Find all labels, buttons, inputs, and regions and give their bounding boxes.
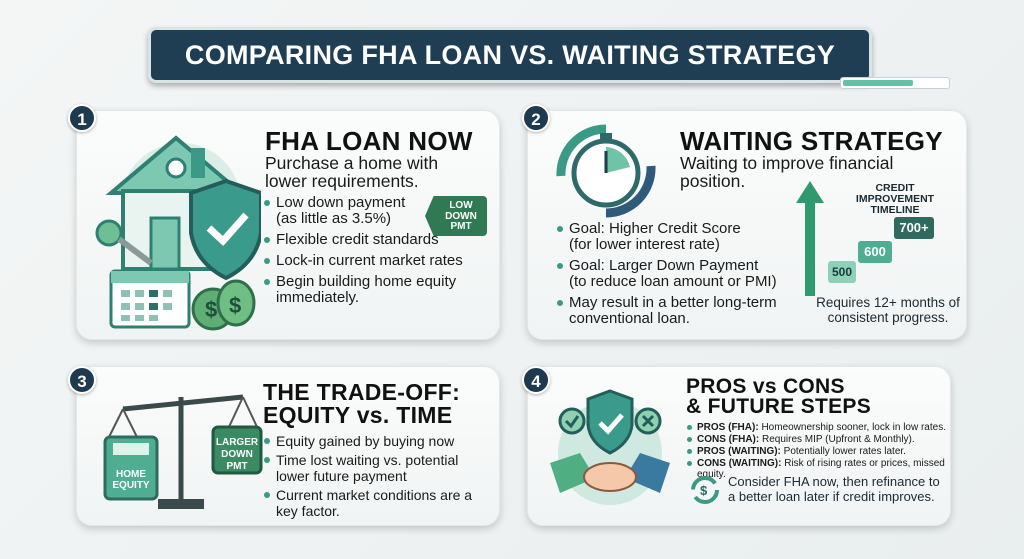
bullet list: Begin building home equity immediately. [276, 273, 456, 306]
tag: low down pmt [425, 196, 487, 236]
panel: trade-off [76, 366, 500, 526]
panel: FHA loan now [76, 110, 500, 340]
chart: credit improvement timeline: 700+ [899, 220, 929, 235]
bullet list: Time lost waiting vs. potential lower future payment [276, 452, 458, 484]
icon: balance scale: LARGER [216, 437, 259, 448]
bullet list [557, 220, 777, 327]
text: 2 [531, 110, 541, 129]
bullet list: PROS (FHA): Homeownership sooner, lock in low rates. [697, 422, 946, 433]
text: 3 [77, 372, 87, 391]
icon: house with shield, key, calendar, money [96, 136, 261, 330]
icon: balance scale [104, 394, 262, 509]
bullet list: (as little as 3.5%) [276, 210, 391, 227]
bullet list [264, 433, 472, 519]
tag: low down pmt: LOW [449, 200, 473, 211]
tag: low down pmt: PMT [450, 221, 472, 232]
bullet list: PROS (WAITING): Potentially lower rates later. [697, 446, 906, 457]
chart: credit improvement timeline [796, 181, 960, 325]
panel: waiting strategy [527, 110, 967, 340]
bullet list: CONS (FHA): Requires MIP (Upfront & Monthly). [697, 434, 915, 445]
text: 4 [531, 372, 541, 391]
bullet list: CONS (WAITING): Risk of rising rates or prices, missed equity. [697, 458, 945, 480]
title banner [148, 27, 872, 83]
chart: credit improvement timeline: Requires 12+ months of consistent progress. [816, 295, 960, 325]
icon: stopwatch with arrows [556, 124, 656, 218]
chart: credit improvement timeline: TIMELINE [870, 204, 920, 216]
heading [686, 375, 871, 418]
bullet list: Low down payment [276, 194, 405, 211]
title banner: COMPARING FHA LOAN VS. WAITING STRATEGY [185, 40, 835, 70]
bullet list: Lock-in current market rates [276, 252, 463, 269]
text: 1 [77, 110, 87, 129]
icon: balance scale: EQUITY [112, 480, 150, 491]
subtitle: Purchase a home with lower requirements. [265, 153, 438, 191]
icon: handshake with shield [550, 389, 670, 505]
progress bar decoration [840, 77, 950, 89]
heading [263, 379, 460, 428]
bullet list: May result in a better long-term conventional loan. [569, 294, 777, 327]
bullet list: (to reduce loan amount or PMI) [569, 273, 777, 290]
icon: refinance [691, 476, 719, 504]
tag: low down pmt: DOWN [445, 210, 477, 222]
bullet list: Flexible credit standards [276, 231, 439, 248]
icon: house with shield, key, calendar, money: $ [229, 293, 241, 318]
heading: & FUTURE STEPS [686, 395, 871, 418]
panel: pros vs cons [527, 366, 951, 526]
heading: EQUITY vs. TIME [263, 402, 452, 428]
bullet list: Goal: Larger Down Payment [569, 257, 758, 274]
bullet list: Goal: Higher Credit Score [569, 220, 741, 237]
subtitle: Waiting to improve financial position. [680, 153, 893, 191]
heading: PROS vs CONS [686, 375, 845, 398]
bullet list [687, 422, 946, 480]
chart: credit improvement timeline: 500 [832, 265, 852, 279]
icon: balance scale: DOWN [221, 449, 253, 460]
bullet list: (for lower interest rate) [569, 236, 720, 253]
callout: refinance note: Consider FHA now, then refinance to a better loan later if credit improves. [728, 474, 940, 504]
bullet list [264, 194, 463, 306]
heading: WAITING STRATEGY [680, 126, 943, 156]
icon: balance scale: HOME [116, 469, 146, 480]
chart: credit improvement timeline: 600 [864, 244, 886, 259]
heading: FHA LOAN NOW [265, 126, 473, 156]
chart: credit improvement timeline: CREDIT [875, 182, 915, 194]
icon: balance scale: PMT [226, 461, 248, 472]
chart: credit improvement timeline: IMPROVEMENT [856, 193, 934, 205]
bullet list: Equity gained by buying now [276, 433, 454, 449]
heading: THE TRADE-OFF: [263, 379, 460, 405]
icon: refinance: $ [700, 483, 708, 498]
bullet list: Current market conditions are a key factor. [276, 487, 472, 519]
icon: house with shield, key, calendar, money: $ [205, 297, 217, 322]
